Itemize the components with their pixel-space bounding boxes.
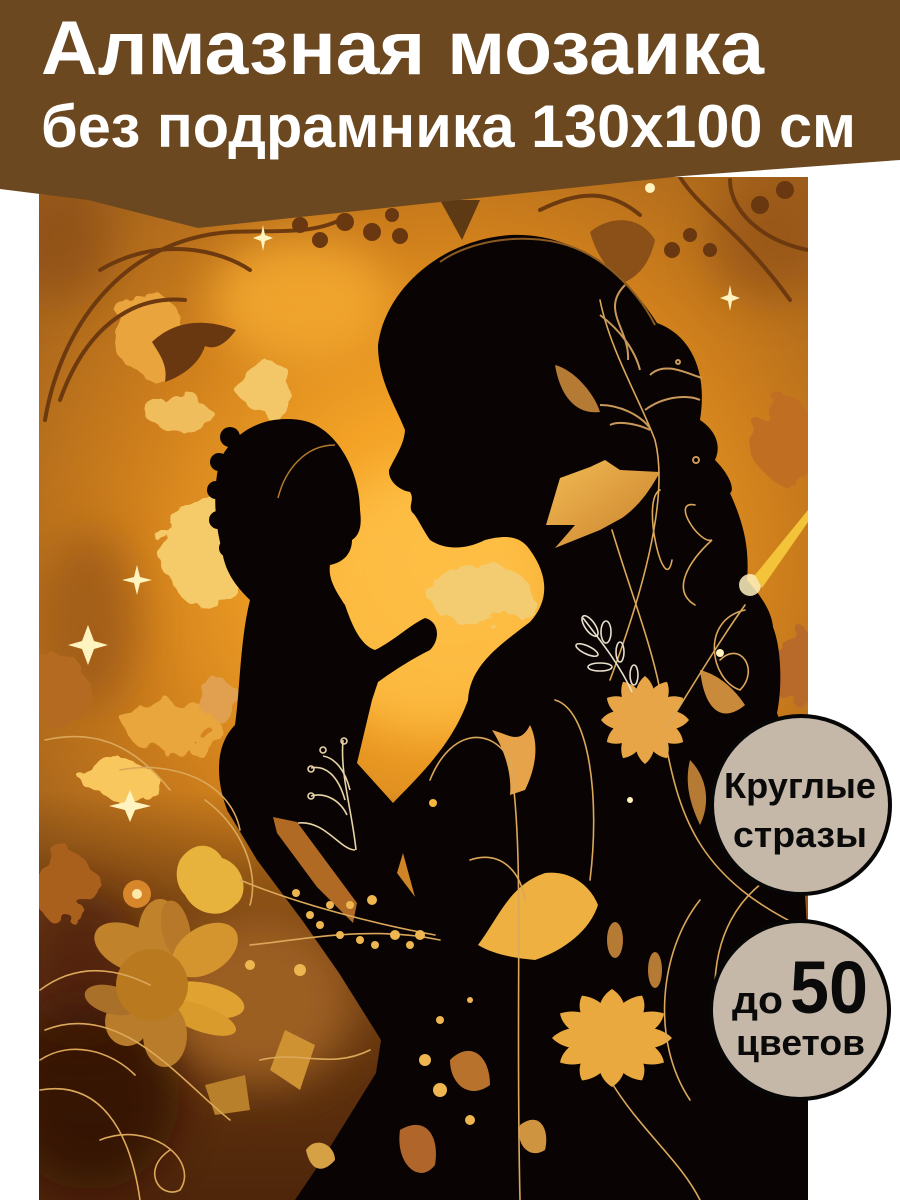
white leaf sprig on dress xyxy=(574,613,638,692)
badge text line 2: стразы xyxy=(733,814,867,855)
light sprig on the baby xyxy=(298,738,356,850)
gold flowers on dress xyxy=(478,365,745,1087)
gold sprig clusters xyxy=(245,889,475,1125)
badge number 50: 50 xyxy=(790,946,868,1029)
large gold flower lower left xyxy=(81,898,248,1067)
branches and vines at top xyxy=(45,177,808,420)
badge: up to 50 colours xyxy=(711,921,889,1099)
flowing gold stems and tendrils xyxy=(40,300,808,1200)
painting background xyxy=(0,177,830,1200)
title line 1: Алмазная мозаика xyxy=(41,6,765,91)
top leaves and berries xyxy=(152,181,794,382)
badge word: colours: цветов xyxy=(736,1022,865,1063)
baby curls xyxy=(207,427,240,556)
baby hair line xyxy=(278,445,335,498)
hair leaf ornaments xyxy=(600,285,702,463)
yellow blossom and glowing orb xyxy=(123,846,244,914)
header banner xyxy=(0,0,900,228)
orange band between arm and body xyxy=(273,817,357,923)
second gap xyxy=(397,853,415,897)
badge: round rhinestones xyxy=(712,716,890,894)
hair highlight xyxy=(440,239,655,325)
mother silhouette xyxy=(225,235,808,1200)
gold accents at bottom of the painting xyxy=(205,1030,546,1173)
badge word: up to: до xyxy=(732,980,783,1022)
painting: mother and child mosaic artwork xyxy=(0,177,830,1200)
badge text line 1: Круглые xyxy=(724,765,876,806)
sparkles xyxy=(68,183,808,822)
baby silhouette xyxy=(215,419,437,830)
title line 2: без подрамника 130х100 см xyxy=(41,93,856,160)
gold foliage patches on background xyxy=(30,295,819,921)
